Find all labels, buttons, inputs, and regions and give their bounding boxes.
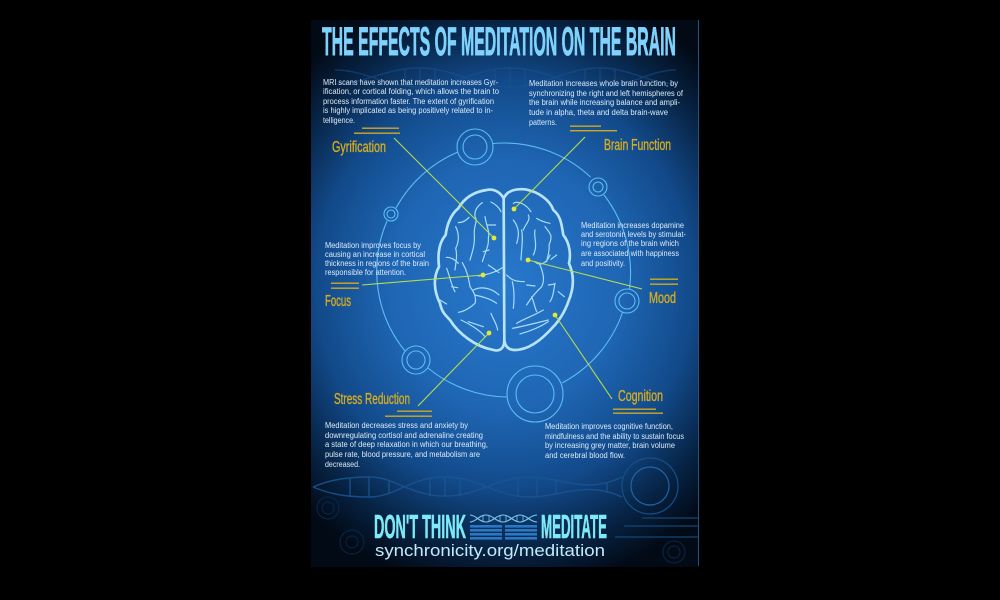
text: focus description: thickness in regions of the brain	[325, 259, 429, 268]
line: stress reduction	[418, 331, 491, 406]
brain illustration	[435, 189, 573, 350]
infographic poster: DON'T THINK	[374, 508, 466, 545]
label: cognition: Cognition	[618, 388, 663, 405]
text: mood description	[581, 221, 686, 268]
text: stress reduction description	[325, 421, 488, 469]
text: focus description: causing an increase in cortical	[325, 250, 425, 259]
faint corner circles decoration	[317, 497, 685, 563]
label: brain function	[570, 126, 671, 154]
text: focus description: Meditation improves focus by	[325, 241, 421, 250]
label: mood	[649, 278, 678, 307]
icon: DNA and bars	[470, 515, 537, 540]
text: brain function description: tude in alpha, theta and delta brain-wave	[529, 108, 669, 117]
text: focus description	[325, 241, 429, 277]
text: stress reduction description: downregulating cortisol and adrenaline creating	[325, 431, 483, 440]
website url: synchronicity.org/meditation	[375, 541, 605, 560]
text: gyrification description: telligence.	[323, 116, 355, 125]
text: brain function description: patterns.	[529, 118, 557, 127]
label: brain function: Brain Function	[604, 137, 671, 154]
line: mood	[526, 258, 642, 289]
right sulci	[507, 202, 564, 334]
text: stress reduction description: Meditation decreases stress and anxiety by	[325, 421, 468, 430]
bottom right lines decoration	[615, 518, 698, 537]
text: cognition description: and cerebral blood flow.	[545, 451, 625, 460]
text: gyrification description: ification, or cortical folding, which allows the brain to	[323, 87, 500, 96]
left hemisphere outline	[435, 190, 504, 350]
text: mood description: and positivity.	[581, 259, 625, 268]
text: gyrification description: MRI scans have shown that meditation increases Gyr-	[323, 78, 498, 87]
line: brain function	[512, 137, 585, 211]
text: brain function description: synchronizing the right and left hemispheres of	[529, 89, 684, 98]
label: stress reduction	[334, 391, 432, 417]
label: focus: Focus	[325, 293, 351, 310]
text: gyrification description	[323, 78, 500, 125]
text: stress reduction description: decreased.	[325, 460, 360, 469]
text: mood description: and serotonin levels by stimulat-	[581, 230, 686, 239]
text: stress reduction description: pulse rate, blood pressure, and metabolism are	[325, 450, 481, 459]
orbit rings	[384, 129, 639, 422]
left sulci	[440, 202, 503, 337]
text: brain function description	[529, 79, 684, 127]
connector lines and dots	[362, 137, 642, 406]
text: cognition description: by increasing grey matter, brain volume	[545, 441, 676, 450]
bottom DNA decoration	[313, 477, 622, 497]
line: focus	[362, 273, 485, 285]
infographic poster: MEDITATE	[541, 508, 607, 545]
text: cognition description	[545, 422, 684, 460]
text: cognition description: Meditation improves cognitive function,	[545, 422, 673, 431]
label: mood: Mood	[649, 290, 676, 307]
top DNA decoration	[335, 68, 676, 87]
text: mood description: are associated with happiness	[581, 249, 679, 258]
label: gyrification: Gyrification	[332, 139, 386, 156]
bottom large ring decoration	[622, 458, 678, 514]
text: gyrification description: process information faster. The extent of gyrification	[323, 97, 494, 106]
label: stress reduction: Stress Reduction	[334, 391, 410, 408]
text: cognition description: mindfulness and the ability to sustain focus	[545, 432, 684, 441]
text: brain function description: Meditation increases whole brain function, by	[529, 79, 678, 88]
label: cognition	[613, 388, 663, 414]
text: stress reduction description: a state of deep relaxation in which our breathing,	[325, 440, 488, 449]
text: mood description: ing regions of the brain which	[581, 239, 679, 248]
label: focus	[325, 282, 359, 310]
text: gyrification description: is highly implicated as being positively related to in-	[323, 106, 493, 115]
text: brain function description: the brain while increasing balance and ampli-	[529, 98, 680, 107]
right edge line	[698, 20, 700, 566]
orbit circle with gaps at the rings	[377, 143, 631, 397]
label: gyrification	[332, 128, 400, 156]
brain midline	[500, 198, 508, 341]
line: gyrification	[394, 138, 496, 240]
text: focus description: responsible for attention.	[325, 268, 406, 277]
right hemisphere outline	[504, 189, 573, 350]
line: cognition	[553, 313, 612, 399]
text: mood description: Meditation increases dopamine	[581, 221, 685, 230]
poster panel	[311, 20, 698, 567]
